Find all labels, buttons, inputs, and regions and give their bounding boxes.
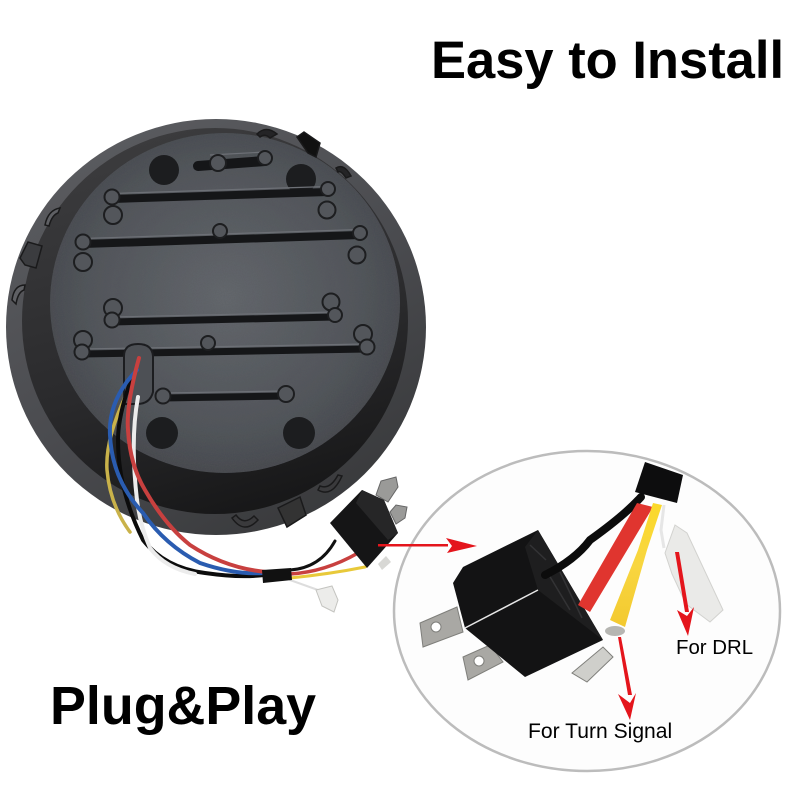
label: for DRL: For DRL <box>676 637 753 659</box>
rib end studs <box>74 151 374 404</box>
icon: rim tabs <box>12 130 351 527</box>
connector side face <box>525 530 603 640</box>
title: Easy to Install <box>431 31 784 90</box>
connector slots <box>530 545 582 618</box>
rib highlights <box>82 152 367 393</box>
pale DRL wire and terminals <box>661 505 723 622</box>
callout circle <box>394 451 780 771</box>
red wire <box>578 503 653 612</box>
arrow: turn signal <box>618 637 636 720</box>
connector prongs <box>420 607 613 682</box>
solder tip <box>605 626 625 636</box>
back plate <box>50 133 400 473</box>
round dark pads <box>146 155 316 449</box>
callout: connector detail <box>394 451 780 771</box>
rib shadows <box>82 161 367 398</box>
arrow: DRL <box>675 552 694 636</box>
raised ribs <box>82 152 367 398</box>
heading: plug and play: Plug&Play <box>50 676 316 736</box>
heat shrink sleeve <box>262 568 292 583</box>
small connector <box>316 477 407 612</box>
headlight back view <box>6 119 426 535</box>
wire grommet slot <box>124 344 153 404</box>
label: for turn signal: For Turn Signal <box>528 720 672 743</box>
heat shrink <box>635 462 683 503</box>
yellow wire <box>610 503 662 627</box>
wiring harness <box>107 358 365 590</box>
connector body <box>453 530 603 677</box>
black wire <box>545 497 641 575</box>
dark inner band <box>22 128 408 514</box>
arrow: connector to detail <box>378 538 477 553</box>
outer metal shell <box>6 119 426 535</box>
